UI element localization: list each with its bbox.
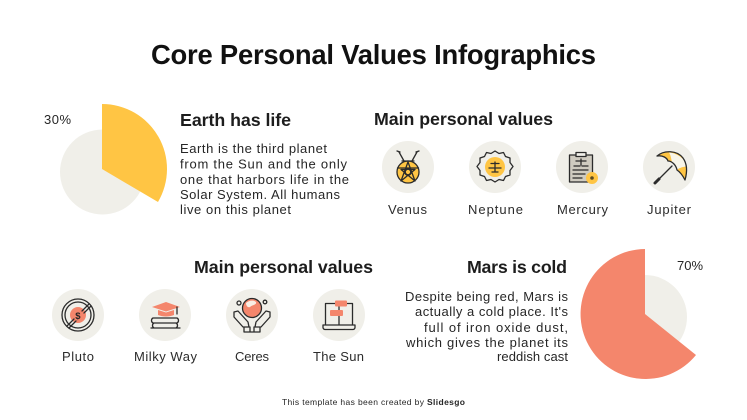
- text block: mars description: full of iron oxide dust,: [424, 320, 568, 335]
- icon: gear with scales: [469, 141, 521, 193]
- text block: mars description: Despite being red, Mars is: [405, 289, 568, 304]
- panel: mars is cold text: [405, 257, 568, 364]
- text block: earth description: Solar System. All humans: [180, 187, 340, 202]
- label: Neptune: Neptune: [468, 202, 523, 217]
- text block: mars description: which gives the planet its: [405, 335, 568, 350]
- footer credit: This template has been created by Slidesgo: [282, 397, 465, 407]
- item: Venus: [382, 141, 434, 217]
- icon: graduation cap on books: [139, 289, 191, 341]
- title: Core Personal Values Infographics: [151, 39, 596, 70]
- pie background circle: [603, 275, 687, 359]
- text block: earth description: [180, 141, 349, 217]
- item: Jupiter: [643, 141, 695, 217]
- heading: main personal values bottom: Main personal values: [194, 257, 373, 277]
- text block: earth description: from the Sun and the only: [180, 156, 348, 172]
- pie slice: 70 percent coral: [581, 249, 696, 379]
- pie background circle: [60, 130, 145, 214]
- label: Ceres: Ceres: [235, 349, 270, 364]
- text block: mars description: reddish cast: [497, 349, 568, 364]
- label: Mercury: Mercury: [557, 202, 608, 217]
- icon: no money sign: $: [75, 311, 81, 322]
- icon: clipboard with scales and badge: [556, 141, 608, 193]
- heading: earth has life: Earth has life: [180, 110, 291, 130]
- panel: earth has life text: [180, 110, 349, 217]
- label: 70%: 70%: [677, 258, 703, 273]
- label: Venus: Venus: [388, 202, 428, 217]
- text block: earth description: one that harbors life in the: [180, 172, 349, 187]
- panel: mars pie chart: [581, 249, 703, 379]
- text block: earth description: live on this planet: [180, 202, 291, 217]
- heading: mars is cold: Mars is cold: [467, 257, 567, 277]
- pie slice: 30 percent yellow: [102, 104, 167, 202]
- panel: earth pie chart: [44, 104, 167, 214]
- label: The Sun: The Sun: [313, 349, 364, 364]
- icon: hands holding globe: [226, 289, 278, 341]
- item: Ceres: [226, 289, 278, 364]
- item: Milky Way: [134, 289, 198, 364]
- icon: laptop with signposts: [313, 289, 365, 341]
- label: Milky Way: Milky Way: [134, 349, 198, 364]
- item: Mercury: [556, 141, 608, 217]
- icon: umbrella: [643, 141, 695, 193]
- item: The Sun: [313, 289, 365, 364]
- label: Jupiter: Jupiter: [647, 202, 692, 217]
- icon: medal ribbon: [382, 141, 434, 193]
- text block: mars description: actually a cold place. It's: [415, 304, 568, 319]
- text block: earth description: Earth is the third planet: [180, 141, 327, 156]
- label: 30%: 30%: [44, 112, 71, 127]
- item: Pluto: [52, 289, 104, 364]
- label: Pluto: Pluto: [62, 349, 94, 364]
- heading: main personal values top: Main personal values: [374, 109, 553, 129]
- item: Neptune: [468, 141, 523, 217]
- text block: mars description: [405, 289, 568, 364]
